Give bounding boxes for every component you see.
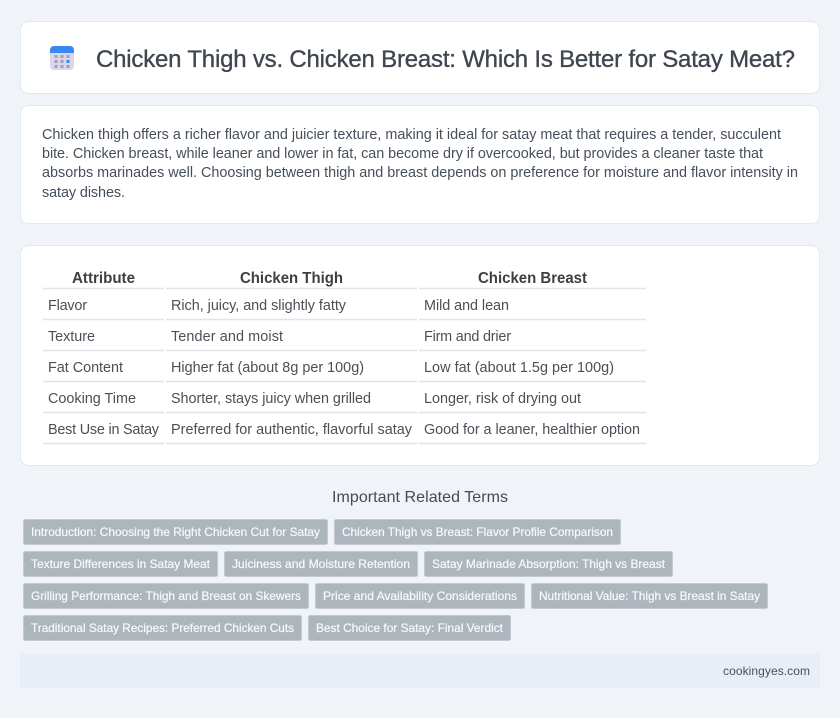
tag xyxy=(224,552,418,576)
row: flavor: Mild and lean xyxy=(424,298,509,314)
intro text: satay dishes. xyxy=(42,185,125,201)
row: cooking time: Longer, risk of drying out xyxy=(424,391,581,407)
icon: calendar xyxy=(50,46,74,70)
tag: Texture Differences in Satay Meat xyxy=(31,557,211,571)
comparison table panel xyxy=(20,246,820,466)
row: best use: Good for a leaner, healthier option xyxy=(424,422,640,438)
row: fat content: Higher fat (about 8g per 100g) xyxy=(171,360,364,376)
row: fat content: Fat Content xyxy=(48,360,123,376)
table header: Chicken Thigh xyxy=(240,270,343,287)
tag: Introduction: Choosing the Right Chicken Cut for Satay xyxy=(31,525,320,539)
intro text: Chicken thigh offers a richer flavor and juicier texture, making it ideal for satay meat that requires a tender, succulent xyxy=(42,127,781,143)
tag: Price and Availability Considerations xyxy=(323,589,517,603)
tag xyxy=(24,584,308,608)
tag xyxy=(24,616,302,640)
row: fat content xyxy=(48,360,614,376)
footer xyxy=(20,654,820,688)
row: cooking time: Shorter, stays juicy when grilled xyxy=(171,391,371,407)
tag xyxy=(424,552,672,576)
footer source text: cookingyes.com xyxy=(723,664,810,678)
row: best use xyxy=(48,422,640,438)
row: best use: Preferred for authentic, flavorful satay xyxy=(171,422,413,438)
tag: Best Choice for Satay: Final Verdict xyxy=(316,621,504,635)
row: flavor: Rich, juicy, and slightly fatty xyxy=(171,298,347,314)
row: texture: Firm and drier xyxy=(424,329,511,345)
tag xyxy=(308,616,510,640)
row: flavor xyxy=(48,298,509,314)
table header: Chicken Breast xyxy=(478,270,587,287)
header panel xyxy=(20,22,820,94)
tag: Satay Marinade Absorption: Thigh vs Breast xyxy=(432,557,666,571)
related terms heading: Important Related Terms xyxy=(332,489,508,506)
tag: Chicken Thigh vs Breast: Flavor Profile Comparison xyxy=(342,525,613,539)
intro text: absorbs marinades well. Choosing between thigh and breast depends on preference for moisture and flavor intensity in xyxy=(42,165,798,181)
tag xyxy=(532,584,768,608)
tag xyxy=(316,584,524,608)
row: cooking time: Cooking Time xyxy=(48,391,136,407)
intro text xyxy=(42,127,798,201)
row: texture xyxy=(48,329,511,345)
row: cooking time xyxy=(48,391,581,407)
row: best use: Best Use in Satay xyxy=(48,422,160,438)
tag: Grilling Performance: Thigh and Breast on Skewers xyxy=(31,589,301,603)
table header xyxy=(72,270,587,287)
tag xyxy=(334,520,620,544)
row: fat content: Low fat (about 1.5g per 100g) xyxy=(424,360,614,376)
table header: Attribute xyxy=(72,270,135,287)
tag xyxy=(24,552,218,576)
row: texture: Texture xyxy=(48,329,95,345)
row: texture: Tender and moist xyxy=(171,329,283,345)
row: flavor: Flavor xyxy=(48,298,87,314)
tag: Nutritional Value: Thigh vs Breast in Satay xyxy=(539,589,760,603)
intro panel xyxy=(20,106,820,224)
intro text: bite. Chicken breast, while leaner and lower in fat, can become dry if overcooked, but provides a cleaner taste that xyxy=(42,146,763,162)
title: Chicken Thigh vs. Chicken Breast: Which Is Better for Satay Meat? xyxy=(96,46,795,73)
tag xyxy=(24,520,328,544)
tag: Traditional Satay Recipes: Preferred Chicken Cuts xyxy=(31,621,294,635)
tag: Juiciness and Moisture Retention xyxy=(232,557,410,571)
related terms tags xyxy=(24,520,768,640)
